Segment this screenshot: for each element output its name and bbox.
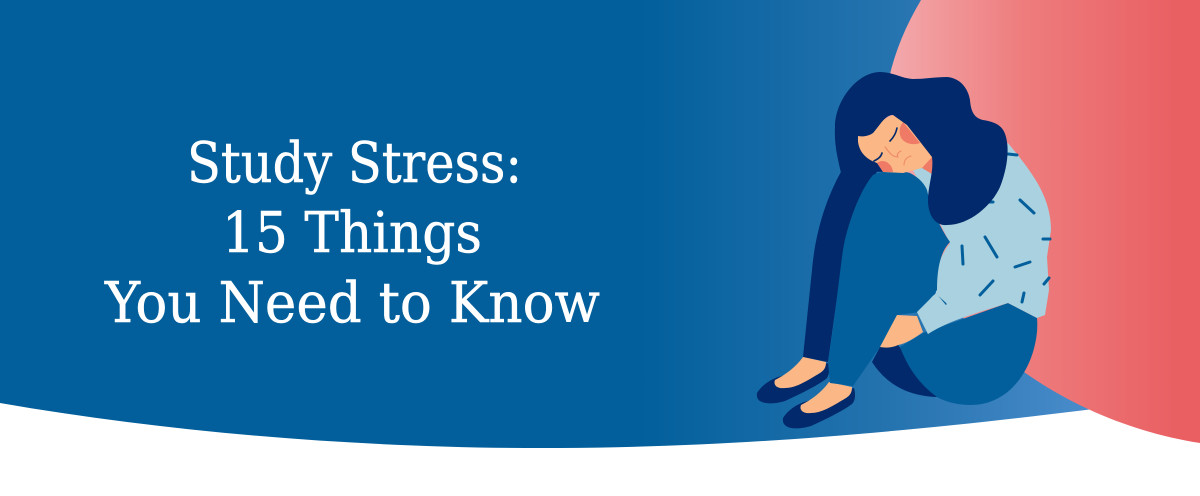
shoe: front foot	[783, 382, 855, 428]
title: You Need to Know	[104, 271, 600, 336]
under leg shadow	[872, 345, 937, 397]
eyes and nose	[874, 128, 911, 165]
hips and thigh	[900, 303, 1037, 405]
title: Study Stress:	[187, 131, 522, 196]
sleeve cuff	[917, 293, 950, 334]
back arm	[803, 165, 880, 362]
front leg and knee	[828, 171, 950, 386]
cheek right	[900, 122, 920, 144]
panel: coral gradient shape	[883, 0, 1200, 443]
illustration: stressed student sitting	[757, 72, 1051, 428]
title: 15 Things	[222, 201, 482, 266]
hair	[835, 72, 1008, 225]
hand	[880, 315, 923, 348]
sweater	[913, 143, 1051, 334]
cheek left	[877, 161, 893, 172]
sweater dashes	[934, 154, 1050, 304]
face	[858, 115, 932, 173]
neck	[922, 152, 940, 174]
shoe: back foot	[757, 357, 829, 403]
title	[104, 131, 600, 336]
